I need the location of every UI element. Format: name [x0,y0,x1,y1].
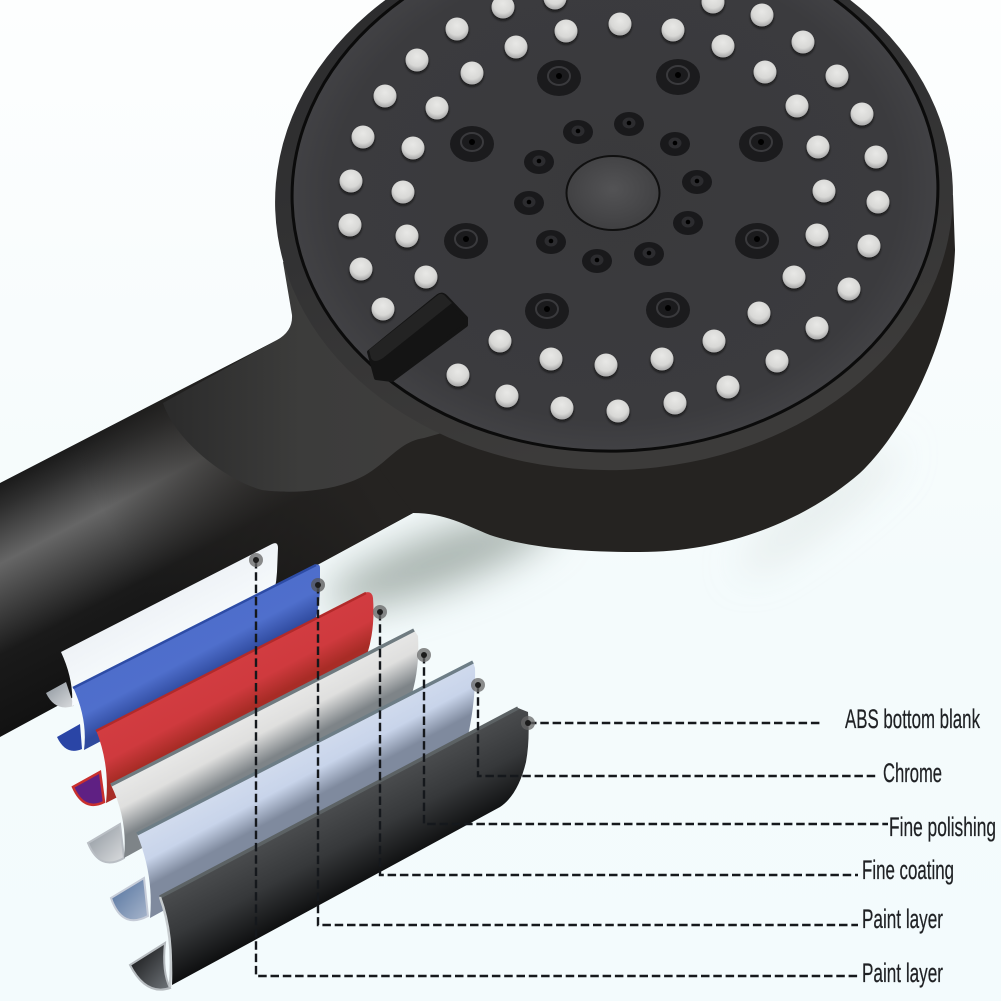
label: Paint layer: Paint layer [862,958,943,988]
mode switch tab [369,294,466,380]
label: Chrome: Chrome [883,758,942,788]
layer: blue [57,564,320,751]
leader lines [256,560,888,976]
shower head body [380,195,955,552]
layer: dark paint [130,708,529,990]
soft shadow under handle [318,439,906,625]
white silicone spray nozzles [338,0,890,422]
layer: red [73,592,373,805]
shower head rim [266,0,962,482]
leader markers [249,553,535,730]
grip transition on handle [163,262,470,492]
layer: white ABS blank [46,543,278,707]
small black nozzles [514,112,712,273]
layer: pale blue [111,662,475,920]
label: Paint layer: Paint layer [862,904,943,934]
centre button [566,156,660,230]
shower handle tube [0,336,440,737]
shower head face [283,0,947,462]
layer: silver grey [88,630,418,863]
large black nozzles [444,59,783,329]
